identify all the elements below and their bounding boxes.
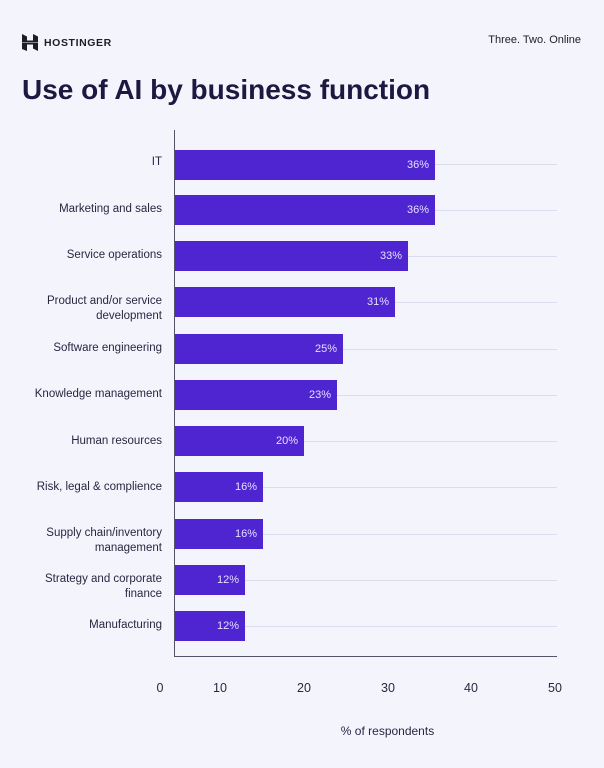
bar: HR	[175, 426, 304, 456]
bar: Knowledge	[175, 380, 337, 410]
title: Use of AI by business function	[22, 74, 430, 105]
x axis ticks: 20	[297, 681, 311, 695]
category labels: Service operations	[67, 249, 162, 261]
category labels: Supply chain/inventory management	[46, 527, 162, 554]
tagline: Three. Two. Online	[488, 34, 581, 46]
icon: logo mark	[22, 34, 38, 51]
bar: HR: 20%	[276, 435, 298, 447]
bar: Supply chain: 16%	[235, 528, 257, 540]
x axis ticks: 0	[157, 681, 163, 695]
category labels: Marketing and sales	[59, 203, 162, 215]
bar: Supply chain	[175, 519, 263, 549]
x axis ticks: 50	[548, 681, 562, 695]
axis title: % of respondents	[341, 724, 434, 738]
x axis ticks	[157, 681, 562, 695]
bar: Product dev: 31%	[367, 296, 389, 308]
x axis ticks: 10	[213, 681, 227, 695]
bar: Marketing: 36%	[407, 204, 429, 216]
category labels: Human resources	[71, 435, 162, 447]
bar: IT	[175, 150, 435, 180]
bar: Strategy: 12%	[217, 574, 239, 586]
bar: Service ops	[175, 241, 408, 271]
category labels: Risk, legal & complience	[37, 481, 162, 493]
bar: Strategy	[175, 565, 245, 595]
bar: Software eng: 25%	[315, 343, 337, 355]
bar: IT: 36%	[407, 159, 429, 171]
category labels: Strategy and corporate finance	[45, 573, 162, 600]
x axis ticks: 40	[464, 681, 478, 695]
bar: Manufacturing: 12%	[217, 620, 239, 632]
logo	[22, 34, 112, 51]
x axis ticks: 30	[381, 681, 395, 695]
category labels: Knowledge management	[35, 388, 162, 400]
bar: Risk: 16%	[235, 481, 257, 493]
bar: Marketing	[175, 195, 435, 225]
bar: Knowledge: 23%	[309, 389, 331, 401]
bar: Manufacturing	[175, 611, 245, 641]
bar: Risk	[175, 472, 263, 502]
category labels: Product and/or service development	[47, 295, 162, 322]
category labels	[35, 156, 162, 631]
bar: Software eng	[175, 334, 343, 364]
category labels: Software engineering	[53, 342, 162, 354]
bar: Product dev	[175, 287, 395, 317]
logo: HOSTINGER	[44, 37, 112, 49]
bar: Service ops: 33%	[380, 250, 402, 262]
category labels: IT	[152, 156, 162, 168]
category labels: Manufacturing	[89, 619, 162, 631]
